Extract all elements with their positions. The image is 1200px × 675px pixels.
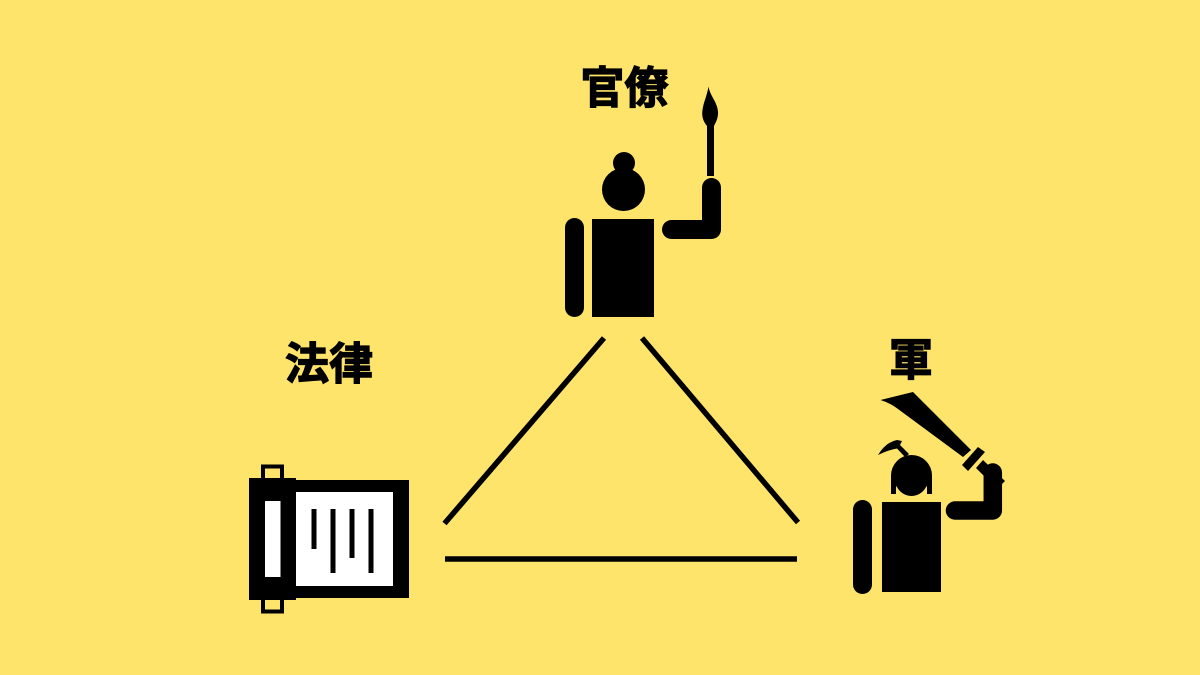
scroll top ring xyxy=(263,466,282,482)
bureaucrat raised right arm xyxy=(672,188,712,230)
soldier raised right arm xyxy=(955,472,993,510)
right edge xyxy=(642,338,798,522)
bureaucrat hair bun xyxy=(613,152,635,174)
heading: military: 軍 xyxy=(889,336,933,385)
icon: law scroll xyxy=(249,466,409,612)
soldier body xyxy=(882,502,941,592)
scroll text lines xyxy=(312,509,374,573)
soldier helmet xyxy=(891,455,932,496)
scroll roller xyxy=(249,478,296,600)
soldier plume xyxy=(878,440,909,457)
bureaucrat head xyxy=(602,168,645,211)
writing brush xyxy=(702,86,718,176)
bureaucrat left arm xyxy=(565,218,584,317)
bottom edge xyxy=(445,556,797,562)
sword handle xyxy=(976,460,1005,486)
soldier head xyxy=(892,456,930,494)
icon: bureaucrat holding a brush xyxy=(565,86,718,317)
triangle connecting the three pillars xyxy=(444,338,798,559)
sword guard xyxy=(962,447,985,471)
heading: law: 法律 xyxy=(285,340,373,389)
scroll paper xyxy=(296,492,393,586)
bureaucrat body xyxy=(592,219,654,317)
soldier left arm xyxy=(853,500,872,594)
roller window xyxy=(265,501,280,577)
icon: soldier raising a sword xyxy=(853,392,1005,594)
scroll bottom ring xyxy=(263,596,282,612)
sword blade xyxy=(880,392,971,457)
scroll paper frame xyxy=(290,480,409,598)
left edge xyxy=(444,338,604,524)
heading: bureaucracy: 官僚 xyxy=(580,64,668,113)
